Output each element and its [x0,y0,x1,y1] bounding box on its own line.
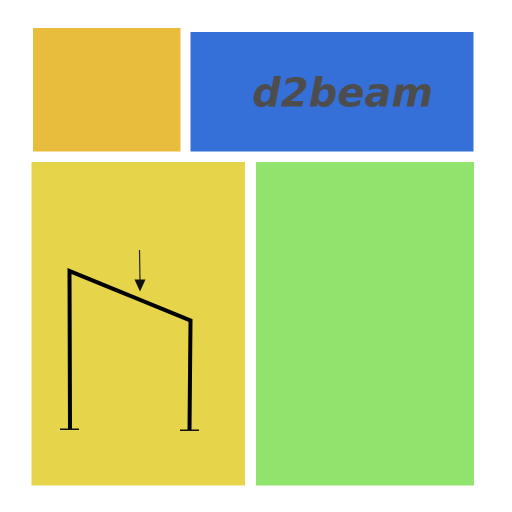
panel: blue title [190,32,474,152]
title: d2beam [252,70,433,116]
right support [180,430,199,431]
panel: yellow diagram [32,162,245,486]
panel: green right [256,162,474,486]
arrow: load [134,250,146,292]
panel: orange top-left [33,28,180,152]
left support [60,428,79,430]
portal frame [70,271,190,430]
